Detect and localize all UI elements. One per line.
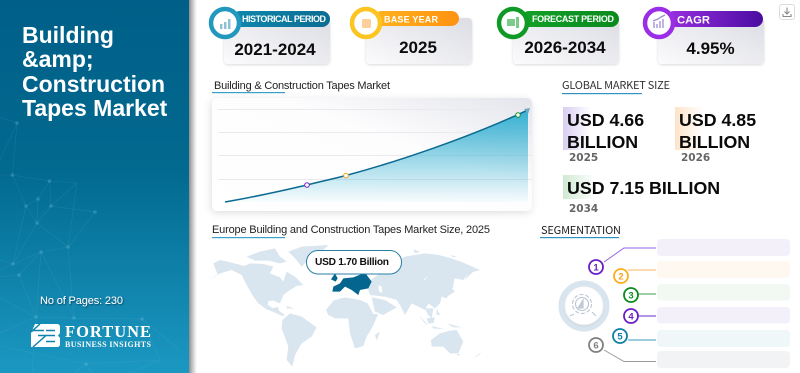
segment 3: 3 [628, 290, 634, 302]
map: europe highlight [331, 273, 372, 295]
market value 2025: 2025 [569, 152, 598, 164]
segment 6: 6 [593, 340, 599, 352]
title: &amp; [22, 46, 94, 72]
heading: market chart: Building & Construction Tapes Market [214, 80, 390, 92]
title [22, 22, 168, 121]
stat card: cagr: 4.95% [686, 39, 735, 58]
segment 5: 5 [617, 332, 623, 342]
market value 2026 [675, 107, 756, 164]
market value 2034: 2034 [569, 203, 598, 215]
sidebar panel [0, 0, 197, 373]
icon: growth chart [653, 15, 665, 28]
icon: segment pie [570, 294, 596, 316]
segment 4 [624, 307, 790, 324]
stat card: cagr: CAGR [677, 14, 710, 26]
world map [210, 245, 482, 367]
stat card: forecast period [499, 9, 619, 64]
stat card: forecast period: 2026-2034 [524, 38, 606, 57]
title: Construction [22, 71, 165, 97]
connectors [604, 248, 656, 362]
icon: calendar [362, 19, 371, 28]
hub circle [562, 284, 606, 328]
icon: bar chart [220, 19, 230, 29]
stat card: cagr [645, 9, 764, 64]
title: Building [22, 22, 114, 48]
market value 2026: 2026 [681, 152, 710, 164]
segment 1: 1 [593, 262, 599, 274]
marker 2025 [305, 183, 309, 187]
segment 3 [624, 284, 790, 302]
market value 2025: USD 4.66 [567, 110, 644, 130]
stat card: base year: BASE YEAR [384, 14, 438, 24]
heading: global market size: GLOBAL MARKET SIZE [562, 77, 670, 93]
icon: logo mark [31, 324, 60, 347]
segment 5 [613, 329, 790, 347]
logo: FORTUNE [65, 322, 151, 341]
market value 2026: BILLION [679, 132, 750, 152]
logo: BUSINESS INSIGHTS [65, 340, 152, 349]
stat card: historical period [211, 9, 330, 64]
icon: forecast chart [507, 17, 519, 28]
market value 2034 [563, 175, 720, 215]
heading: segmentation: SEGMENTATION [541, 222, 621, 238]
market value 2034: USD 7.15 BILLION [567, 178, 720, 198]
page count: No of Pages: 230 [40, 295, 123, 307]
trend line [225, 110, 528, 202]
title: Tapes Market [22, 95, 168, 121]
stat card: base year: 2025 [399, 38, 437, 57]
segment 2 [614, 261, 790, 283]
area chart panel [212, 98, 532, 211]
segment 4: 4 [628, 312, 634, 322]
chart area [225, 109, 528, 202]
marker 2034 [516, 113, 520, 117]
segmentation diagram [562, 239, 790, 368]
icon: download [780, 4, 794, 20]
logo [31, 322, 152, 349]
marker 2026 [344, 173, 348, 178]
segment 1 [589, 239, 790, 274]
segment 2: 2 [618, 272, 624, 282]
arrow head [524, 108, 530, 114]
stat card: historical period: 2021-2024 [234, 40, 316, 59]
map: americas [210, 245, 328, 367]
map: europe, asia, africa, oceania [326, 249, 482, 358]
stat card: base year [352, 9, 472, 64]
stat card: historical period: HISTORICAL PERIOD [242, 14, 326, 24]
stat card: forecast period: FORECAST PERIOD [532, 14, 614, 24]
heading: europe map: Europe Building and Construction Tapes Market Size, 2025 [212, 224, 490, 236]
callout: europe value [306, 250, 402, 274]
callout: europe value: USD 1.70 Billion [315, 257, 389, 268]
market value 2025 [563, 107, 644, 164]
market value 2025: BILLION [567, 132, 638, 152]
market value 2026: USD 4.85 [679, 110, 756, 130]
segment 6 [589, 338, 790, 368]
